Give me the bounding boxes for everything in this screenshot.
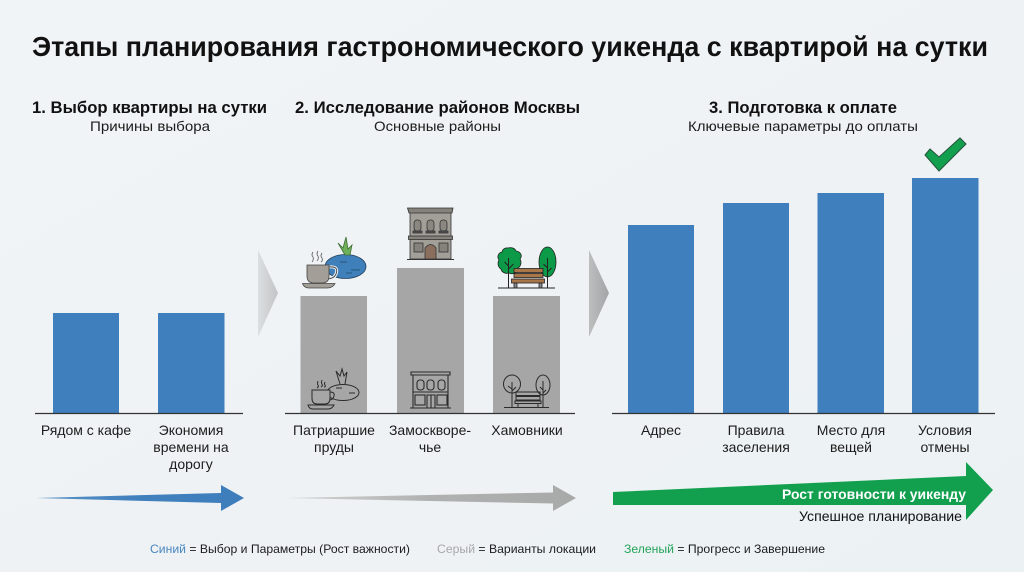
bar labels: districts: Хамовники <box>491 422 563 438</box>
icon: park outline <box>504 375 550 408</box>
title: Этапы планирования гастрономического уикенда с квартирой на сутки <box>32 31 988 62</box>
panel: step 1 choosing the apartment <box>32 99 267 511</box>
bar labels: reasons: Рядом с кафе <box>41 422 131 438</box>
bar labels: parameters: отмены <box>920 439 970 455</box>
icon: historic building <box>407 208 454 260</box>
subheading: step 1: Причины выбора <box>90 118 210 134</box>
bar labels: reasons <box>41 422 229 472</box>
icon: building outline <box>410 372 451 408</box>
legend item: green: Зеленый = Прогресс и Завершение <box>624 542 825 556</box>
heading: step 3: 3. Подготовка к оплате <box>709 99 897 117</box>
bar labels: parameters: Правила <box>728 422 785 438</box>
subheading: step 2: Основные районы <box>374 118 501 134</box>
legend item: gray: Серый = Варианты локации <box>437 542 596 556</box>
subheading: step 3: Ключевые параметры до оплаты <box>688 118 918 134</box>
bar labels: reasons: дорогу <box>169 456 213 472</box>
bar labels: parameters: Место для <box>817 422 885 438</box>
bar labels: parameters: вещей <box>830 439 872 455</box>
arrow: green progress <box>613 462 993 520</box>
legend <box>150 542 825 556</box>
icon: park with bench <box>498 247 556 288</box>
bar labels: reasons: Экономия <box>159 422 223 438</box>
arrow caption: Рост готовности к уикенду <box>782 486 966 502</box>
panel: step 2 Moscow districts <box>285 99 580 511</box>
heading: step 2: 2. Исследование районов Москвы <box>295 99 580 117</box>
icon: green check mark <box>925 138 966 171</box>
bar labels: districts: пруды <box>314 439 354 455</box>
bar labels: districts: чье <box>419 439 441 455</box>
bar labels: parameters: заселения <box>722 439 790 455</box>
arrow: chevron from step 2 to step 3 <box>589 250 609 337</box>
bar chart: districts <box>285 268 575 414</box>
legend item: blue: Синий = Выбор и Параметры (Рост важности) <box>150 542 410 556</box>
bar labels: districts: Замоскворе- <box>389 422 471 438</box>
bar chart: reasons <box>35 313 243 414</box>
bar labels: districts <box>293 422 563 455</box>
arrow: gray options <box>286 485 576 511</box>
panel: step 3 preparing for payment <box>612 99 995 524</box>
arrow: blue growth <box>36 485 244 511</box>
bar labels: parameters <box>641 422 972 455</box>
bar labels: districts: Патриаршие <box>293 422 375 438</box>
icon: cup and pond <box>302 237 366 288</box>
arrow: chevron from step 1 to step 2 <box>258 250 278 337</box>
icon: cup and pond outline <box>308 369 359 409</box>
bar labels: reasons: времени на <box>153 439 229 455</box>
bar labels: parameters: Адрес <box>641 422 681 438</box>
arrow subcaption: Успешное планирование <box>799 508 962 524</box>
bar labels: parameters: Условия <box>918 422 972 438</box>
heading: step 1: 1. Выбор квартиры на сутки <box>32 99 267 117</box>
bar chart: key parameters <box>612 178 995 414</box>
